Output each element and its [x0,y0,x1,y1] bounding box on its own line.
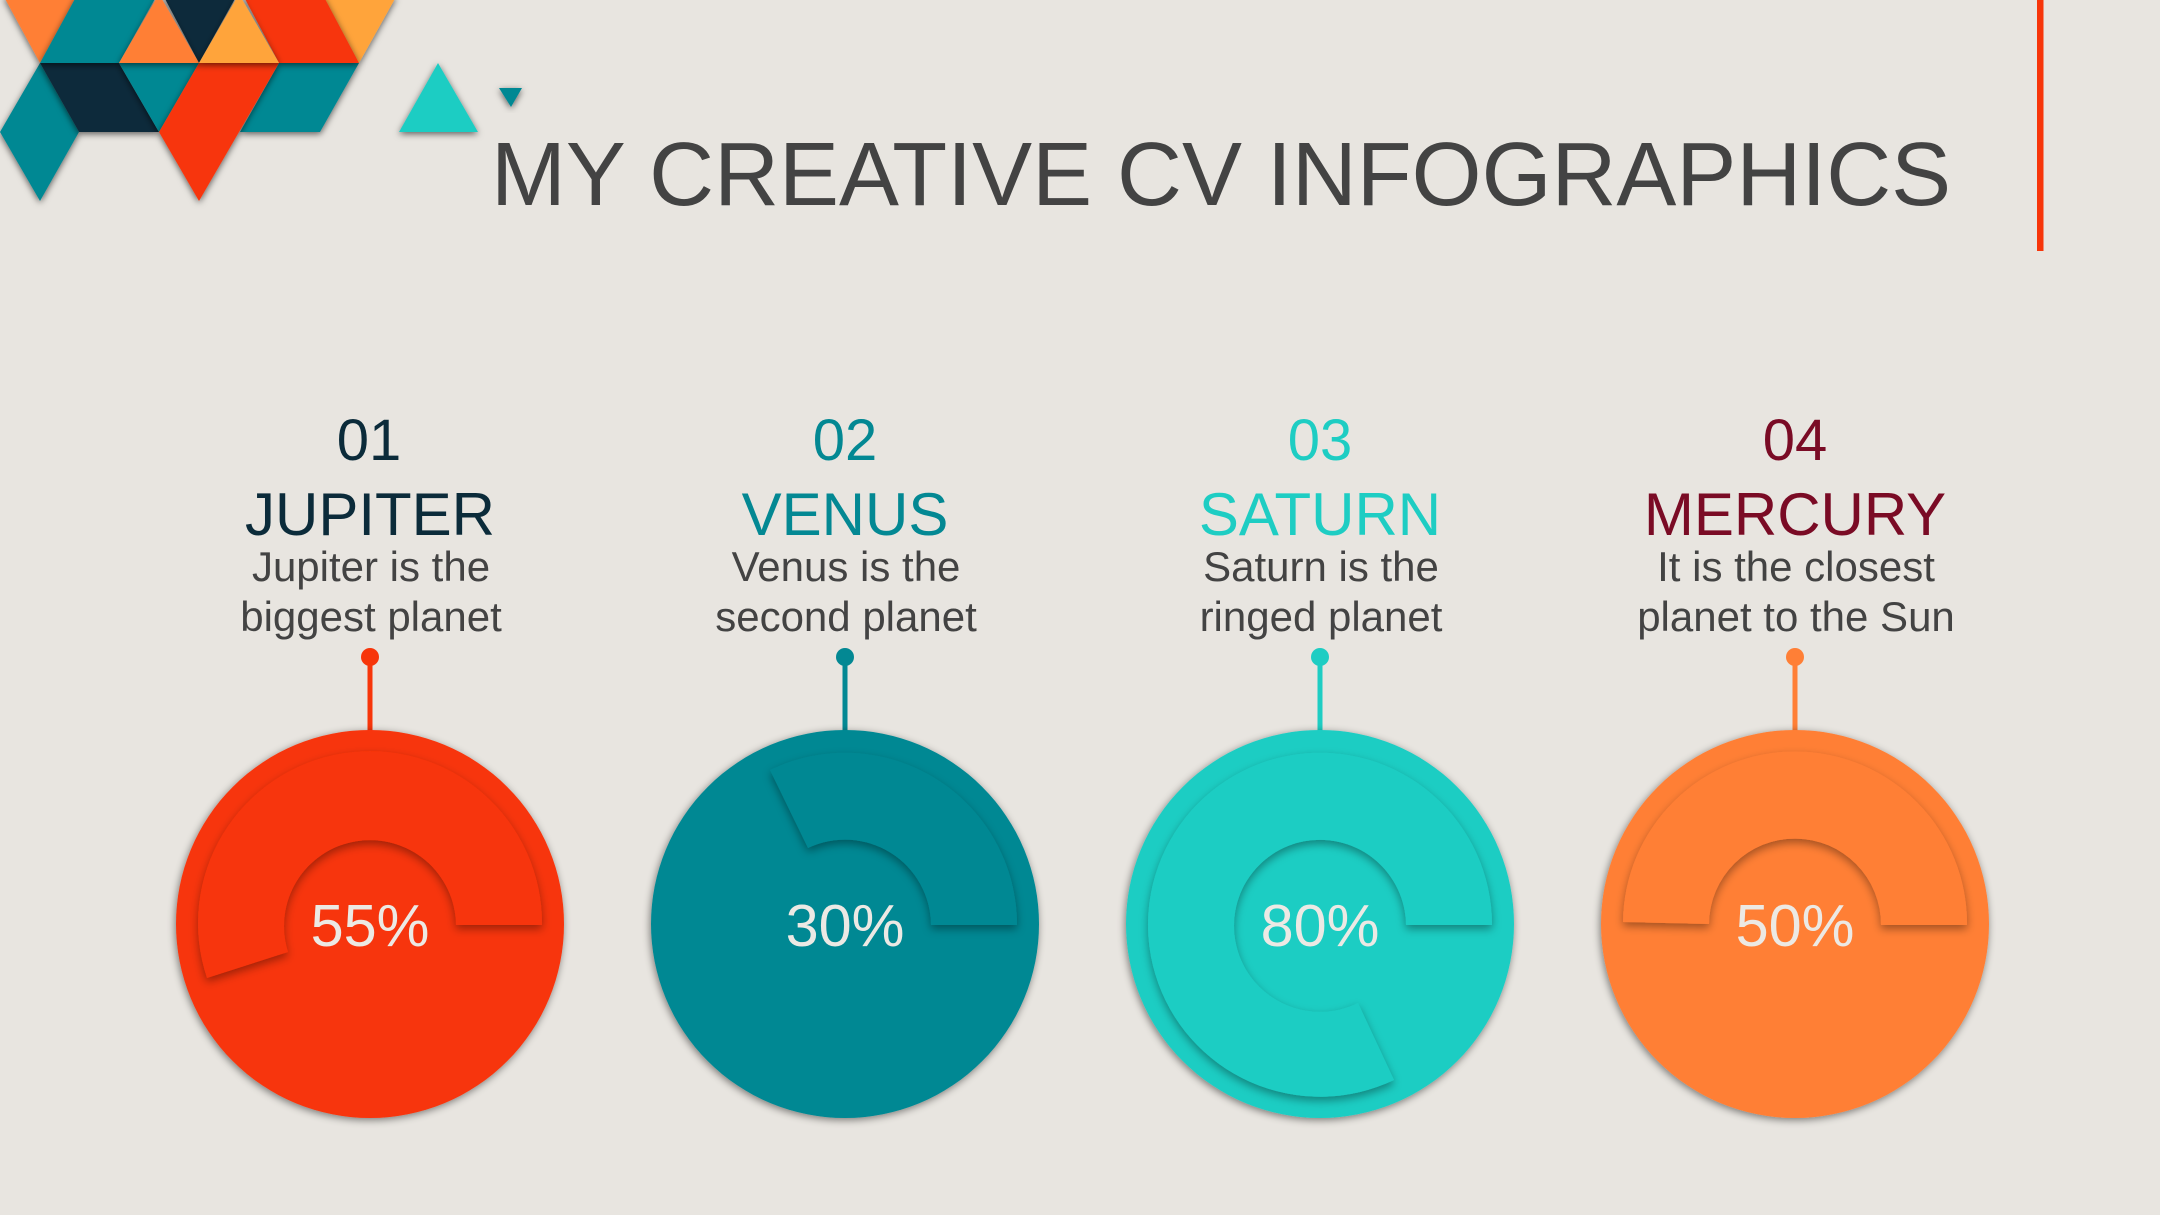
circle chart 80% [1126,730,1514,1118]
panel: Saturn [1126,408,1514,1118]
text: Venus description: second planet [715,593,977,640]
circle chart 30% [651,730,1039,1118]
pin connector [1311,648,1329,732]
panel: Venus [651,408,1039,1118]
accent line [2037,0,2044,251]
pin connector [361,648,379,732]
circle chart 50% [1601,730,1989,1118]
circle chart 80%: 80% [1261,892,1379,959]
text: Jupiter description: biggest planet [240,593,502,640]
text: Mercury description: planet to the Sun [1637,593,1955,640]
panel: Jupiter [176,408,564,1118]
circle chart 55%: 55% [311,892,429,959]
heading: Saturn name: SATURN [1199,481,1441,548]
icon: cyan triangle [399,63,478,132]
text: Mercury description: It is the closest [1657,543,1935,590]
text: Saturn description: ringed planet [1200,593,1443,640]
pin connector [836,648,854,732]
text: Jupiter description: Jupiter is the [252,543,490,590]
heading: Mercury name: MERCURY [1644,481,1946,548]
circle chart 55% [176,730,564,1118]
title: MY CREATIVE CV INFOGRAPHICS [491,125,1951,225]
text: Venus description: Venus is the [732,543,960,590]
heading: Venus number: 02 [813,408,877,473]
heading: Jupiter name: JUPITER [245,481,495,548]
heading: Saturn number: 03 [1288,408,1352,473]
pin connector [1786,648,1804,732]
panel: Mercury [1601,408,1989,1118]
decorative triangle mosaic [0,0,396,201]
text: Saturn description: Saturn is the [1203,543,1439,590]
icon: small teal triangle [499,88,522,107]
circle chart 50%: 50% [1736,892,1854,959]
circle chart 30%: 30% [786,892,904,959]
heading: Jupiter number: 01 [337,408,401,473]
heading: Mercury number: 04 [1763,408,1827,473]
heading: Venus name: VENUS [742,481,948,548]
